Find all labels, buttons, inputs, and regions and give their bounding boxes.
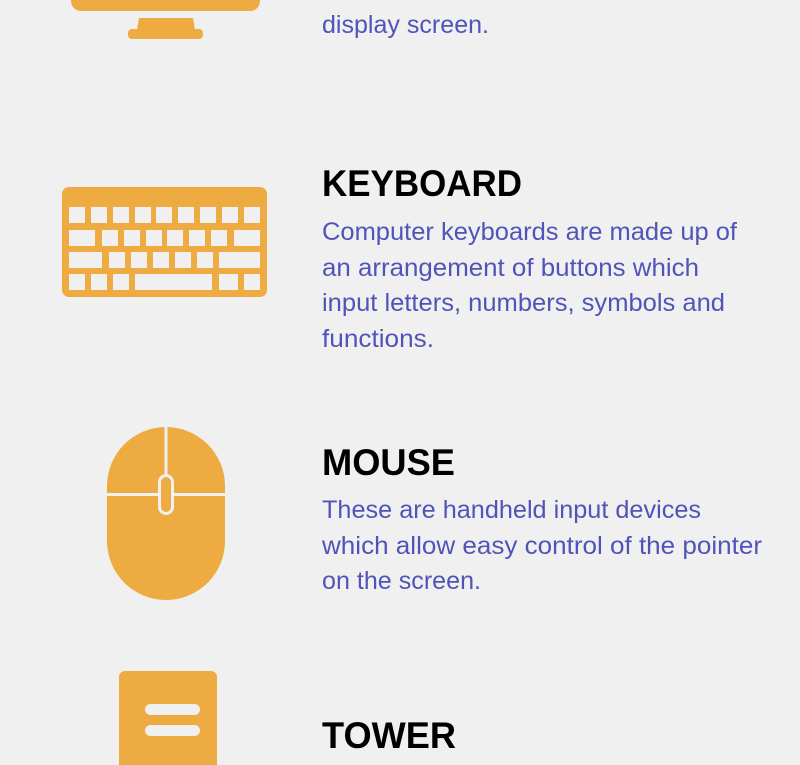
text: keyboard description [322,218,737,353]
text: mouse description [321,496,762,595]
heading: tower: TOWER [322,715,456,756]
text: keyboard description: an arrangement of buttons which [322,254,699,282]
icon: mouse [107,427,225,600]
icon: tower [119,671,217,765]
icon: monitor [71,0,260,39]
text: keyboard description: functions. [322,325,434,353]
icon: keyboard [62,187,267,297]
text: mouse description: on the screen. [322,567,481,595]
text: mouse description: These are handheld input devices [322,496,701,524]
text: keyboard description: input letters, numbers, symbols and [322,289,725,317]
text: monitor description end: display screen. [322,11,489,39]
heading: keyboard: KEYBOARD [322,163,522,204]
text: mouse description: which allow easy control of the pointer [321,532,762,560]
heading: mouse: MOUSE [322,442,455,483]
text: keyboard description: Computer keyboards are made up of [322,218,737,246]
